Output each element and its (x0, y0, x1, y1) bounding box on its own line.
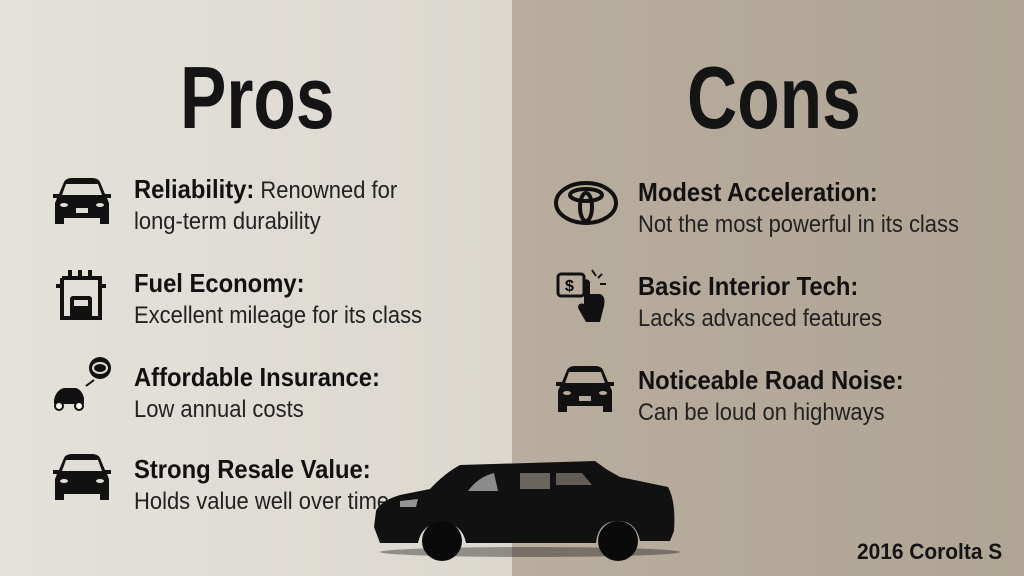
text: resale value: Strong Resale Value: (134, 454, 371, 484)
text: acceleration: Modest Acceleration: (638, 177, 878, 207)
icon: car with logo (54, 357, 111, 411)
caption: model: 2016 Corolta S (857, 539, 1002, 564)
text: insurance: Affordable Insurance: (134, 362, 380, 392)
icon: car front noise (556, 366, 614, 412)
text: insurance (134, 362, 380, 423)
icon: touch screen (556, 270, 606, 322)
text: reliability: long-term durability (134, 208, 321, 235)
text: fuel economy (134, 268, 422, 329)
text: fuel economy: Excellent mileage for its class (134, 302, 422, 329)
text: acceleration: Not the most powerful in its class (638, 211, 959, 238)
text: acceleration (638, 177, 959, 238)
text: reliability: Reliability: Renowned for (134, 174, 397, 204)
icon: car front resale (53, 454, 111, 500)
text: insurance: Low annual costs (134, 396, 304, 423)
text: interior tech: Lacks advanced features (638, 305, 882, 332)
icon: fuel station (56, 270, 106, 320)
car silhouette (374, 461, 680, 561)
text: road noise (638, 365, 904, 426)
icon: car front reliability (53, 178, 111, 224)
text: fuel economy: Fuel Economy: (134, 268, 305, 298)
text: road noise: Can be loud on highways (638, 399, 885, 426)
text: road noise: Noticeable Road Noise: (638, 365, 904, 395)
title: Pros: Pros (180, 48, 335, 147)
title: Cons: Cons (687, 48, 861, 147)
text: reliability (134, 174, 397, 235)
text: interior tech (638, 271, 882, 332)
text: resale value (134, 454, 389, 515)
icon: toyota logo (554, 181, 618, 225)
icon: touch screen: $ (565, 278, 574, 295)
text: resale value: Holds value well over time (134, 488, 389, 515)
text: interior tech: Basic Interior Tech: (638, 271, 858, 301)
